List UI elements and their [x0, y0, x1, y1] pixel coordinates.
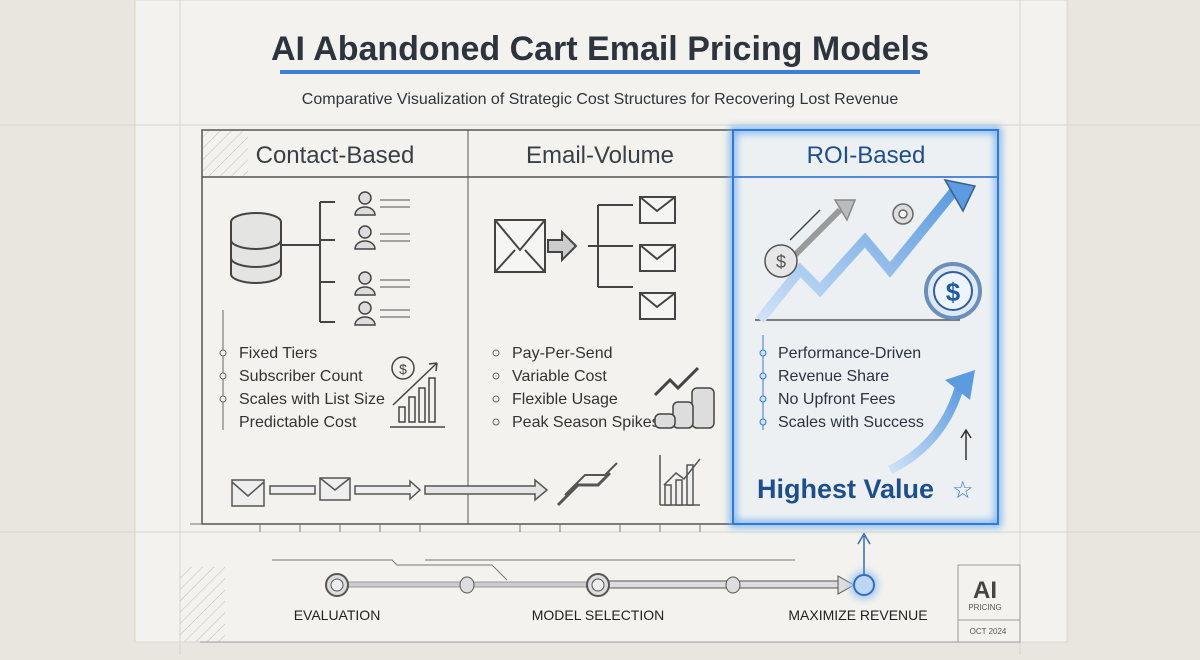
icon: big blue arrow [890, 370, 975, 470]
icon: big envelope [495, 197, 675, 319]
main table [202, 130, 998, 524]
timeline: MAXIMIZE REVENUE [788, 607, 928, 623]
icon: growth chart: $ [776, 252, 786, 272]
panel: contact-based: Contact-Based [256, 142, 414, 169]
logo block: PRICING [968, 603, 1002, 612]
panel: roi-based: ROI-Based [807, 142, 925, 169]
timeline: MODEL SELECTION [532, 607, 664, 623]
timeline: EVALUATION [294, 607, 380, 623]
icon: growth chart: $ [946, 277, 961, 307]
icon: growth chart [755, 180, 980, 320]
highest value label: Highest Value [757, 474, 934, 504]
panel: roi-based: No Upfront Fees [778, 391, 895, 408]
panel: contact-based: Subscriber Count [239, 368, 363, 385]
panel: email-volume [493, 142, 714, 431]
panel: email-volume: Email-Volume [526, 142, 674, 169]
timeline [180, 534, 1000, 642]
panel: contact-based: Scales with List Size [239, 391, 385, 408]
logo block: AI [973, 577, 997, 604]
logo block [958, 565, 1020, 642]
logo block: OCT 2024 [970, 627, 1007, 636]
ruler ticks [190, 524, 700, 532]
panel: roi-based [733, 130, 998, 524]
panel: email-volume: Peak Season Spikes [512, 414, 660, 431]
panel: roi-based: Performance-Driven [778, 345, 921, 362]
panel: roi-based: ☆ [952, 477, 974, 504]
panel: contact-based [220, 142, 445, 431]
panel: contact-based: Fixed Tiers [239, 345, 317, 362]
icon: database [231, 202, 335, 322]
panel: email-volume: Variable Cost [512, 368, 607, 385]
bottom flow arrows [232, 455, 700, 506]
panel: email-volume: Flexible Usage [512, 391, 618, 408]
icon: dollar bar chart [390, 357, 445, 427]
sheet background [135, 0, 1067, 642]
subtitle: Comparative Visualization of Strategic Cost Structures for Recovering Lost Revenue [302, 91, 898, 108]
icon: dollar bar chart: $ [399, 361, 407, 377]
icon: coins and arrow [655, 368, 714, 428]
panel: email-volume: Pay-Per-Send [512, 345, 612, 362]
panel: roi-based: Revenue Share [778, 368, 889, 385]
title: AI Abandoned Cart Email Pricing Models [271, 30, 929, 68]
icon: subscribers [355, 192, 410, 325]
panel: contact-based: Predictable Cost [239, 414, 357, 431]
panel: roi-based: Scales with Success [778, 414, 924, 431]
